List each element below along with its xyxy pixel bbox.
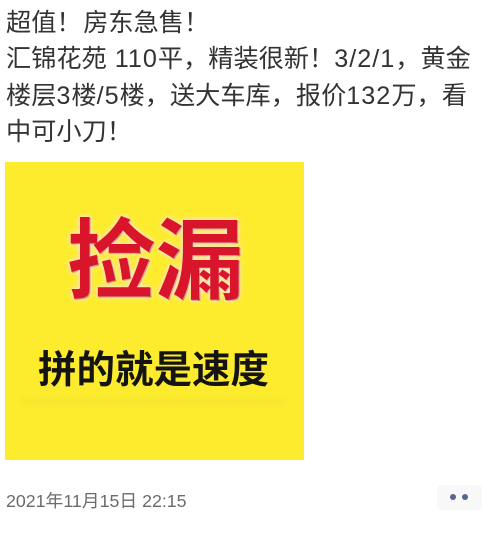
poster shadow line [20, 399, 285, 404]
text line 2: 汇锦花苑 110平，精装很新！3/2/1，黄金 [6, 45, 471, 73]
text line 4: 中可小刀！ [6, 118, 132, 146]
dot left [450, 494, 456, 500]
poster subheading: 拼的就是速度 [38, 349, 269, 392]
text line 3: 楼层3楼/5楼，送大车库，报价132万，看 [6, 82, 467, 110]
poster heading: 捡漏 [67, 212, 244, 311]
post text block [6, 9, 471, 146]
dot right [462, 494, 468, 500]
post timestamp: 2021年11月15日 22:15 [6, 491, 187, 511]
text line 1: 超值！ 房东急售！ [6, 9, 209, 37]
yellow poster image [5, 162, 304, 460]
more options button [437, 485, 482, 510]
